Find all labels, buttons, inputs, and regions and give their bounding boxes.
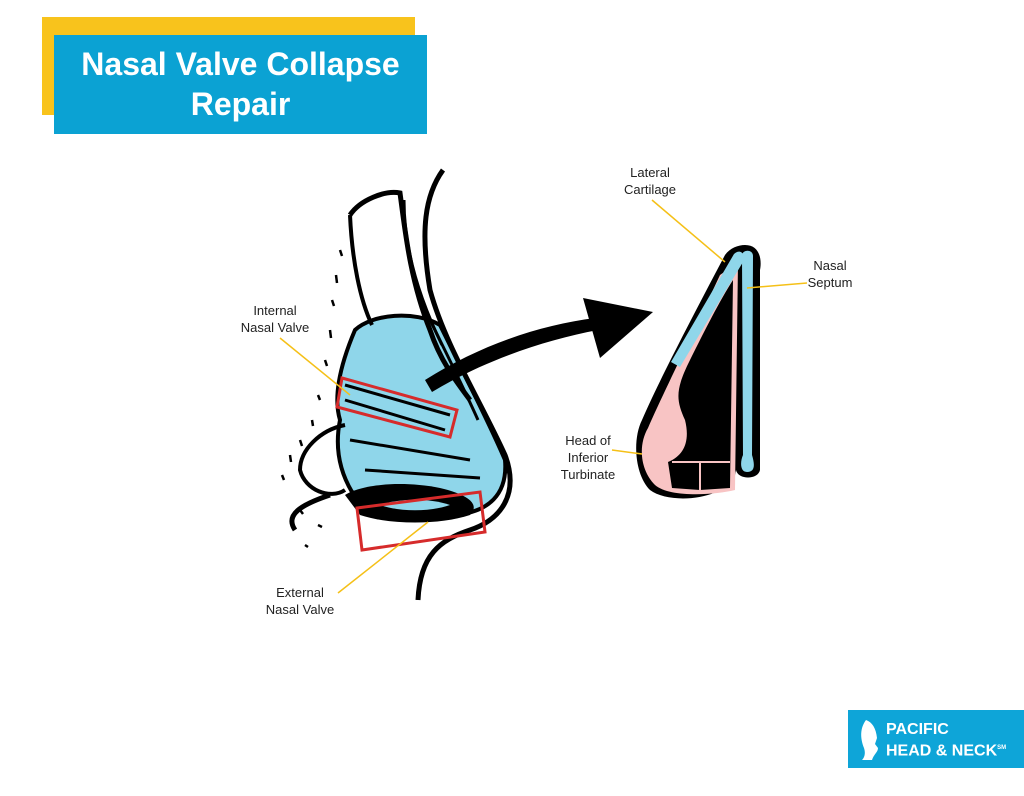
- cross-section diagram: [636, 245, 761, 498]
- title blue box: [54, 35, 427, 134]
- label: nasal septum: Nasal: [813, 258, 847, 273]
- label: lateral cartilage: Cartilage: [624, 182, 676, 197]
- label: external nasal valve: [266, 585, 334, 617]
- logo: [848, 710, 1024, 768]
- label: nasal septum: [808, 258, 852, 290]
- title block: [42, 17, 427, 134]
- label: internal nasal valve: Internal: [253, 303, 297, 318]
- label: head of inferior turbinate: Inferior: [568, 450, 608, 465]
- nose illustration: [282, 170, 510, 600]
- title blue box: Nasal Valve Collapse: [81, 46, 400, 82]
- logo icon: head profile: [861, 720, 878, 760]
- label: external nasal valve: External: [276, 585, 324, 600]
- label: internal nasal valve: Nasal Valve: [241, 320, 309, 335]
- label: lateral cartilage: [624, 165, 676, 197]
- label: head of inferior turbinate: Head of: [565, 433, 611, 448]
- red box: external valve: [357, 492, 485, 550]
- label: nasal septum: Septum: [808, 275, 852, 290]
- label: internal nasal valve: [241, 303, 309, 335]
- label: lateral cartilage: Lateral: [630, 165, 670, 180]
- logo text: [886, 721, 1006, 759]
- title yellow backdrop: [42, 17, 415, 115]
- leader lines: [280, 200, 807, 593]
- label: external nasal valve: Nasal Valve: [266, 602, 334, 617]
- logo text: PACIFIC: [886, 721, 949, 738]
- arrow: [425, 298, 653, 392]
- title blue box: Repair: [191, 86, 290, 122]
- label: head of inferior turbinate: [561, 433, 615, 482]
- red box: internal valve: [337, 378, 457, 437]
- logo text: HEAD & NECKSM: [886, 742, 1006, 759]
- label: head of inferior turbinate: Turbinate: [561, 467, 615, 482]
